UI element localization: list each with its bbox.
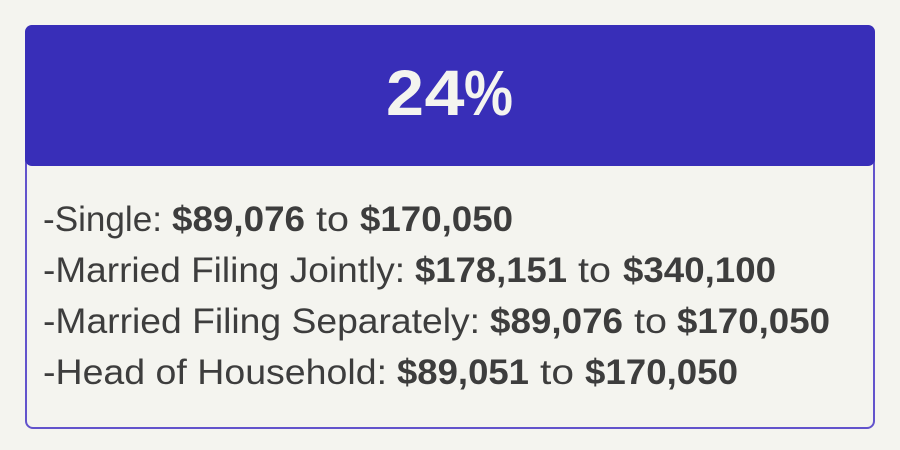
line: head of household: $170,050	[585, 353, 738, 392]
line: married filing separately: -Married Filing Separately:	[43, 302, 480, 341]
line: married filing jointly: $340,100	[623, 251, 776, 290]
heading: 24%: 4	[424, 57, 465, 129]
header band	[25, 25, 875, 166]
line: head of household	[43, 353, 738, 392]
line: single: $89,076	[172, 200, 305, 239]
line: head of household: -Head of Household:	[43, 353, 387, 392]
heading: 24%	[386, 57, 513, 129]
line: married filing separately: $170,050	[677, 302, 830, 341]
line: single: $170,050	[360, 200, 513, 239]
line: married filing jointly	[43, 251, 776, 290]
line: head of household: to	[540, 353, 574, 392]
heading: 24%: %	[464, 57, 513, 129]
line: married filing separately	[43, 302, 830, 341]
line: married filing jointly: to	[578, 251, 611, 290]
line: married filing jointly: $178,151	[415, 251, 567, 290]
bracket list	[43, 200, 830, 392]
heading: 24%: 2	[386, 57, 424, 129]
line: single	[43, 200, 513, 239]
line: married filing separately: to	[634, 302, 667, 341]
line: head of household: $89,051	[397, 353, 529, 392]
line: married filing jointly: -Married Filing Jointly:	[43, 251, 405, 290]
line: married filing separately: $89,076	[490, 302, 623, 341]
line: single: -Single:	[43, 200, 162, 239]
line: single: to	[316, 200, 349, 239]
